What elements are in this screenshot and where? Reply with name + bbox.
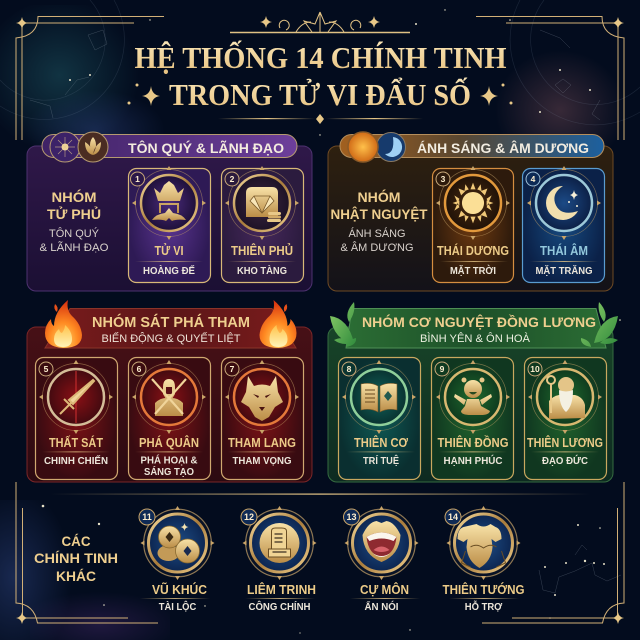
card 7: Tham Lang	[222, 358, 304, 480]
star 13: Cự Môn: CỰ MÔN	[360, 582, 409, 597]
card 10: Thiên Lương	[524, 358, 606, 480]
card 9: Thiên Đồng: 9	[440, 364, 445, 374]
card 6: Phá Quân: 6	[137, 364, 142, 374]
card 7: Tham Lang: THAM LANG	[228, 435, 296, 450]
group label: Nhóm Tử Phủ: TỬ PHỦ	[47, 207, 101, 222]
star 11: Vũ Khúc: 11	[142, 512, 152, 522]
header pill: Ánh sáng & Âm dương	[340, 132, 604, 162]
panel: Nhật Nguyệt group	[328, 132, 613, 291]
star 12: Liêm Trinh: 12	[244, 512, 254, 522]
panel: Cơ Nguyệt Đồng Lương group	[328, 302, 618, 482]
header pill: Ánh sáng & Âm dương: ÁNH SÁNG & ÂM DƯƠNG	[417, 141, 589, 156]
star 11: Vũ Khúc	[139, 506, 214, 613]
card 8: Thiên Cơ: 8	[347, 364, 352, 374]
group label: Nhóm Tử Phủ: TÔN QUÝ	[49, 227, 100, 240]
group label: Nhóm Nhật Nguyệt: NHÓM	[358, 190, 400, 205]
card 8: Thiên Cơ	[338, 358, 420, 480]
star 12: Liêm Trinh: CÔNG CHÍNH	[248, 600, 310, 613]
group label: Nhóm Tử Phủ: NHÓM	[52, 190, 96, 205]
star 13: Cự Môn: ẨN NÓI	[364, 600, 399, 613]
group label: Nhóm Tử Phủ	[40, 190, 109, 254]
star 14: Thiên Tướng	[442, 506, 524, 613]
group label: Nhóm Nhật Nguyệt: & ÂM DƯƠNG	[340, 241, 414, 254]
icon: left leaves	[330, 302, 356, 347]
card 6: Phá Quân: SÁNG TẠO	[144, 465, 194, 478]
card 9: Thiên Đồng: HẠNH PHÚC	[444, 454, 502, 467]
star 14: Thiên Tướng: 14	[448, 512, 458, 522]
card 5: Thất Sát: THẤT SÁT	[49, 435, 103, 450]
title	[134, 39, 506, 112]
card 1: Tử Vi: TỬ VI	[154, 243, 184, 258]
card 4: Thái Âm: MẶT TRĂNG	[536, 264, 593, 277]
card 10: Thiên Lương: THIÊN LƯƠNG	[527, 435, 603, 450]
card 7: Tham Lang: 7	[230, 364, 235, 374]
card 6: Phá Quân	[128, 358, 210, 480]
star 13: Cự Môn: 13	[346, 512, 357, 522]
banner: Nhóm Cơ Nguyệt Đồng Lương	[346, 308, 606, 348]
banner: Nhóm Cơ Nguyệt Đồng Lương: NHÓM CƠ NGUYỆT ĐỒNG LƯƠNG	[362, 313, 596, 330]
star 14: Thiên Tướng: THIÊN TƯỚNG	[442, 582, 524, 597]
section label: Các chính tinh khác: CHÍNH TINH	[34, 550, 118, 566]
banner: Nhóm Sát Phá Tham	[45, 308, 296, 348]
header pill: Tôn quý & Lãnh đạo: TÔN QUÝ & LÃNH ĐẠO	[128, 141, 284, 156]
card 5: Thất Sát: 5	[44, 364, 49, 374]
panel: Tử Phủ group	[27, 132, 312, 291]
section label: Các chính tinh khác	[34, 533, 118, 584]
card 8: Thiên Cơ: THIÊN CƠ	[354, 435, 409, 450]
title sparkles and divider	[128, 84, 512, 124]
card 3: Thái Dương: THÁI DƯƠNG	[437, 243, 509, 258]
card 3: Thái Dương: MẶT TRỜI	[450, 264, 496, 277]
section label: Các chính tinh khác: KHÁC	[56, 568, 96, 584]
card 1: Tử Vi: 1	[135, 174, 140, 184]
icon: left flame	[45, 300, 82, 348]
card 1: Tử Vi: HOÀNG ĐẾ	[143, 264, 195, 277]
card 2: Thiên Phủ: KHO TÀNG	[237, 264, 287, 277]
section label: Các chính tinh khác: CÁC	[62, 533, 90, 549]
card 3: Thái Dương	[432, 166, 514, 282]
card 10: Thiên Lương: 10	[530, 364, 540, 374]
card 5: Thất Sát: CHINH CHIẾN	[44, 454, 108, 467]
star 12: Liêm Trinh	[241, 506, 316, 613]
title: TRONG TỬ VI ĐẨU SỐ	[169, 76, 471, 112]
star 13: Cự Môn	[344, 506, 420, 613]
banner: Nhóm Cơ Nguyệt Đồng Lương: BÌNH YÊN & ÔN HOÀ	[420, 332, 531, 345]
card 9: Thiên Đồng: THIÊN ĐỒNG	[438, 435, 508, 450]
icon: right leaves	[581, 302, 618, 347]
card 1: Tử Vi	[128, 166, 210, 282]
card 8: Thiên Cơ: TRÍ TUỆ	[363, 454, 399, 467]
card 7: Tham Lang: THAM VỌNG	[232, 456, 292, 467]
star 11: Vũ Khúc: TÀI LỘC	[159, 600, 196, 613]
card 6: Phá Quân: PHÁ QUÂN	[139, 435, 199, 450]
banner: Nhóm Sát Phá Tham: BIẾN ĐỘNG & QUYẾT LIỆT	[102, 332, 241, 345]
card 10: Thiên Lương: ĐẠO ĐỨC	[542, 454, 588, 467]
star 14: Thiên Tướng: HỖ TRỢ	[465, 600, 503, 613]
card 2: Thiên Phủ: THIÊN PHỦ	[231, 243, 293, 258]
star 12: Liêm Trinh: LIÊM TRINH	[247, 582, 316, 597]
card 2: Thiên Phủ: 2	[230, 174, 235, 184]
card 9: Thiên Đồng	[432, 358, 514, 480]
group label: Nhóm Nhật Nguyệt: NHẬT NGUYỆT	[330, 207, 428, 222]
group label: Nhóm Tử Phủ: & LÃNH ĐẠO	[40, 241, 109, 254]
card 4: Thái Âm: 4	[531, 174, 536, 184]
card 5: Thất Sát	[36, 358, 118, 480]
header pill: Tôn quý & Lãnh đạo	[42, 132, 297, 162]
icon: right flame	[260, 300, 296, 348]
group label: Nhóm Nhật Nguyệt: ÁNH SÁNG	[348, 227, 406, 240]
card 2: Thiên Phủ	[222, 166, 304, 282]
banner: Nhóm Sát Phá Tham: NHÓM SÁT PHÁ THAM	[92, 313, 250, 331]
title ornament	[230, 12, 410, 32]
star 11: Vũ Khúc: VŨ KHÚC	[152, 582, 208, 597]
card 6: Phá Quân: PHÁ HOẠI &	[140, 454, 198, 466]
card 4: Thái Âm: THÁI ÂM	[540, 243, 588, 258]
card 3: Thái Dương: 3	[441, 174, 446, 184]
card 4: Thái Âm	[522, 166, 604, 282]
group label: Nhóm Nhật Nguyệt	[330, 190, 428, 254]
panel: Sát Phá Tham group	[27, 300, 312, 482]
title: HỆ THỐNG 14 CHÍNH TINH	[134, 39, 506, 75]
